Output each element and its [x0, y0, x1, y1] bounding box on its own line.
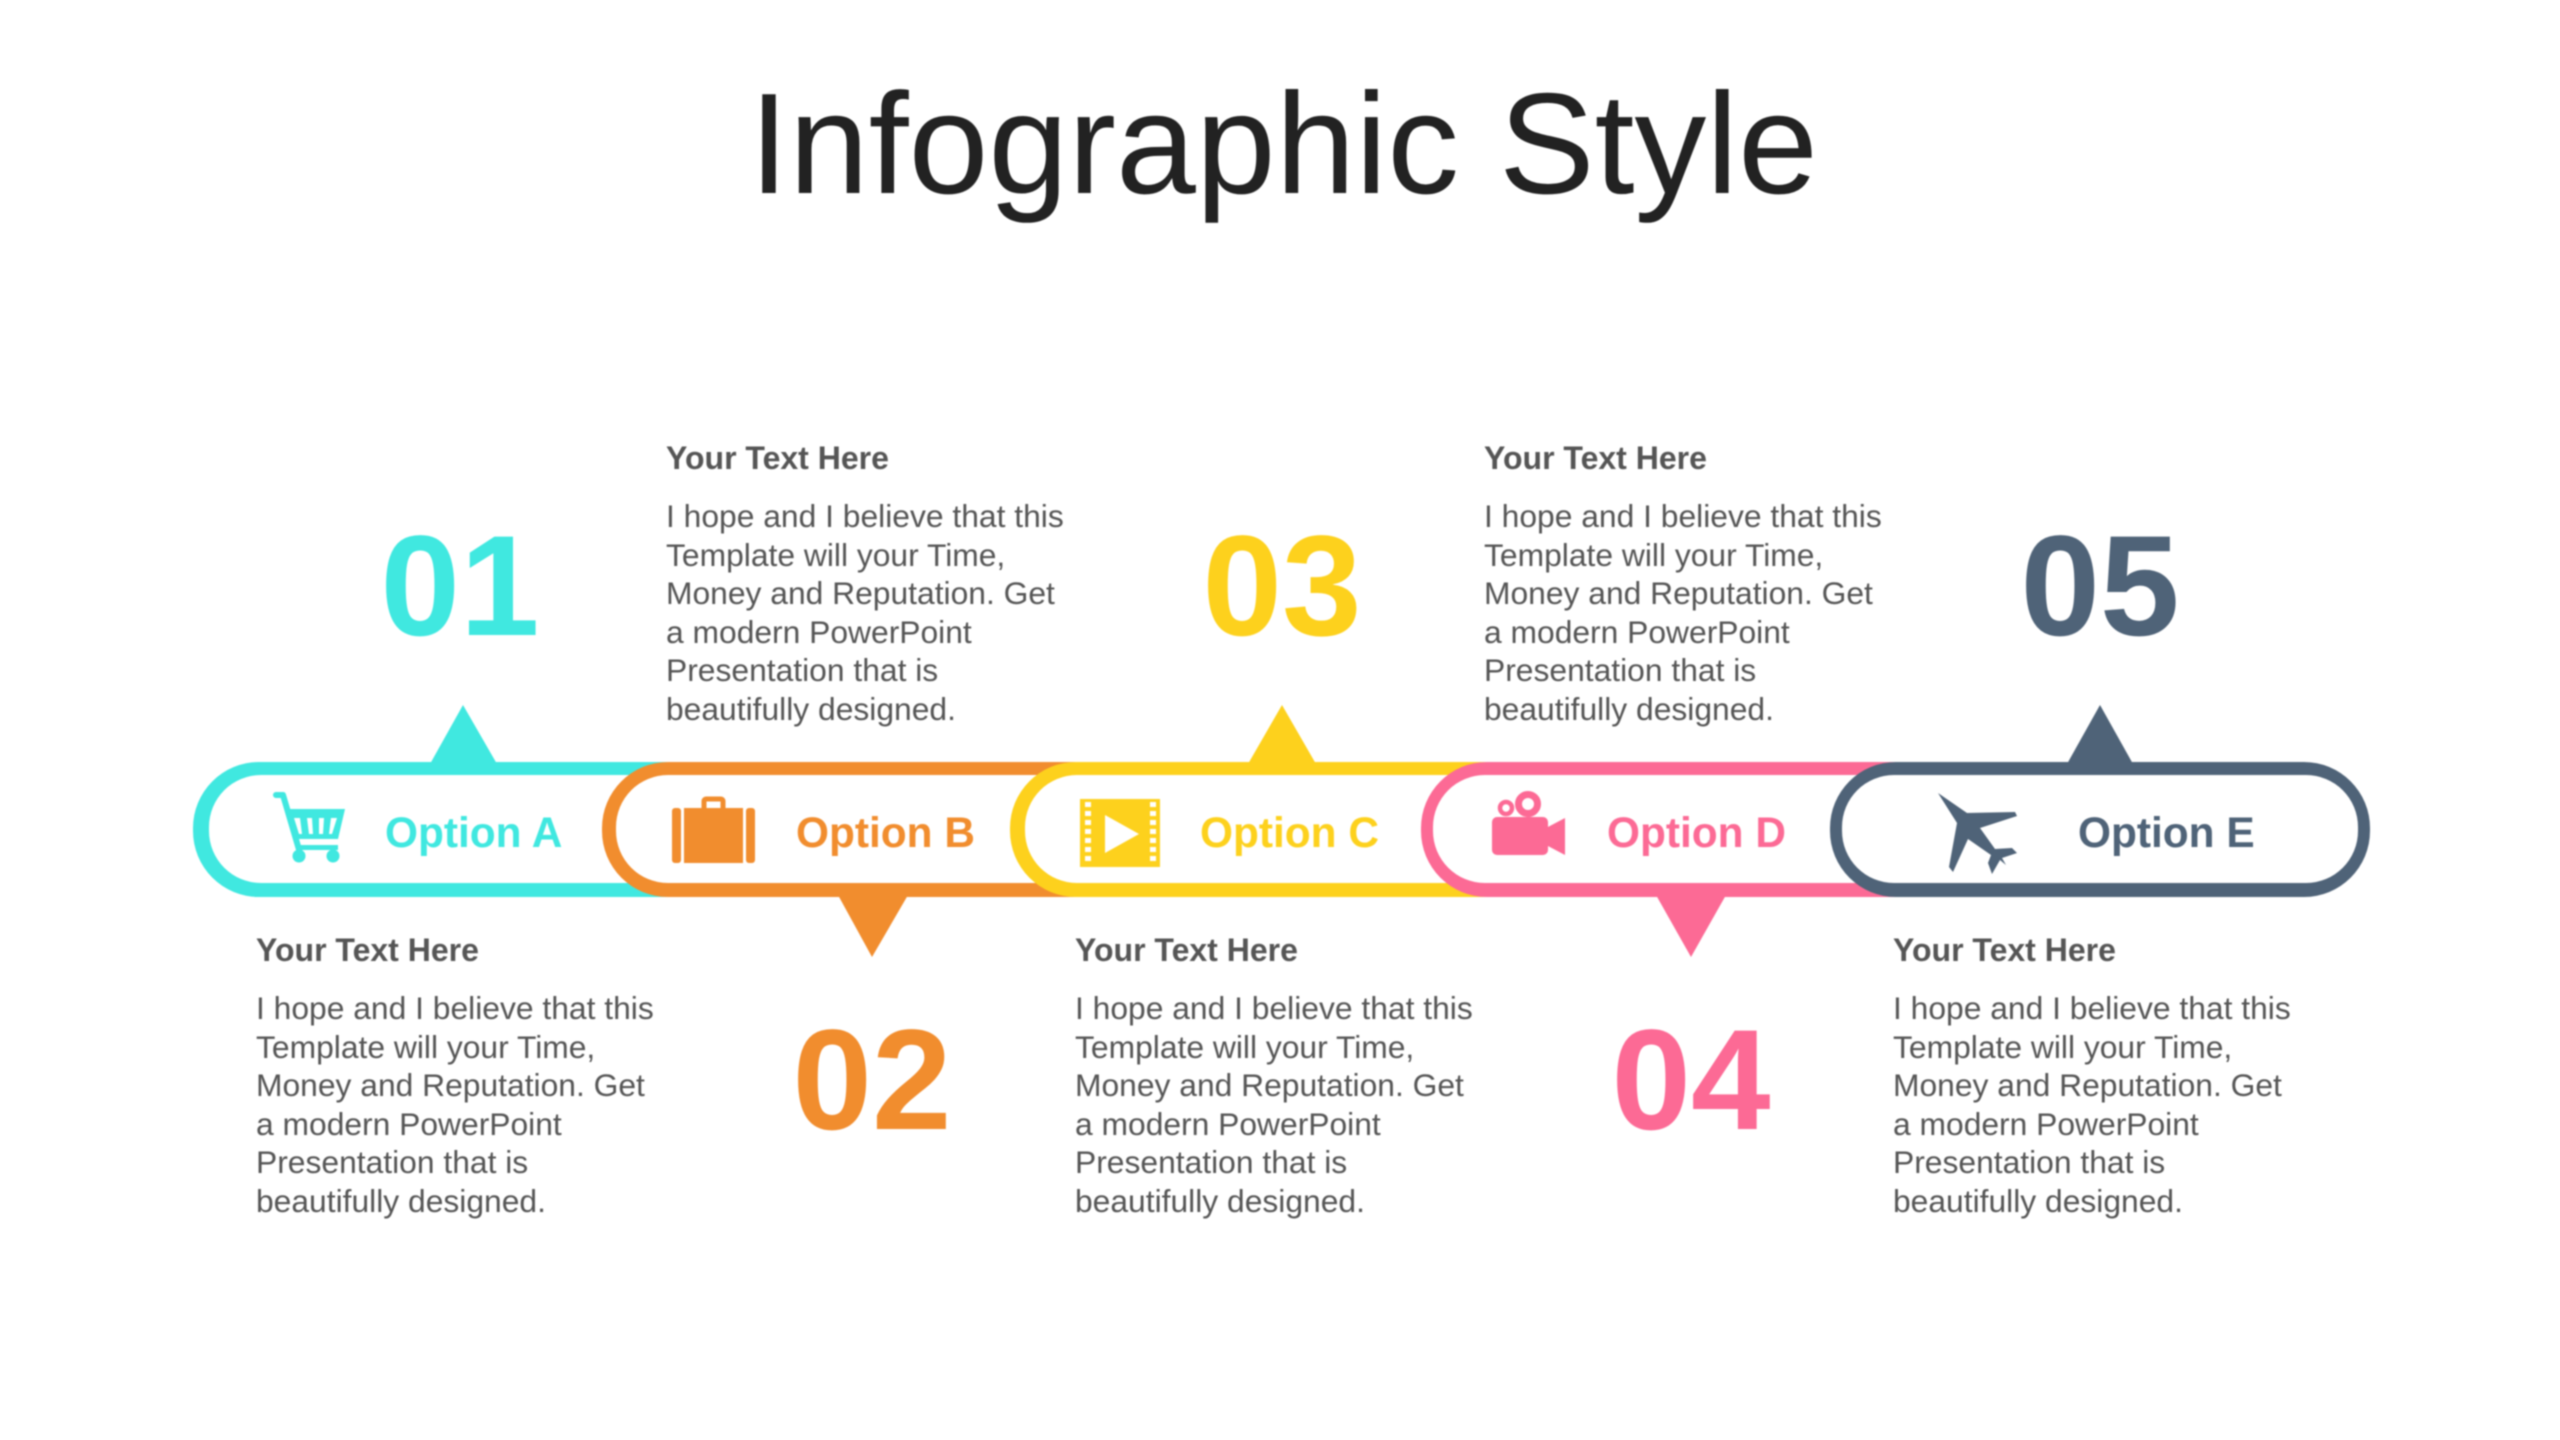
text block 1: Template will your Time,: [256, 1029, 595, 1065]
pointer C: [1248, 705, 1316, 764]
icon: suitcase: [672, 799, 755, 863]
text block 4: a modern PowerPoint: [1484, 614, 1790, 650]
text block 2: Template will your Time,: [666, 537, 1005, 573]
text block 5: Template will your Time,: [1893, 1029, 2232, 1065]
text block 4: Your Text Here: [1484, 440, 1707, 476]
text block 2: Presentation that is: [666, 652, 938, 688]
pointer B: [838, 895, 908, 957]
label E: Option E: [2078, 809, 2255, 856]
icon: airplane: [1938, 793, 2017, 874]
text block 2: I hope and I believe that this: [666, 498, 1064, 534]
text block 3: Presentation that is: [1075, 1144, 1347, 1180]
number 01: 01: [380, 507, 540, 666]
text block 2: [666, 440, 1064, 727]
pointer E: [2067, 705, 2133, 764]
panel: option A: [193, 705, 733, 897]
text block 4: Presentation that is: [1484, 652, 1756, 688]
panel: option B: [602, 762, 1142, 957]
text block 3: a modern PowerPoint: [1075, 1106, 1381, 1142]
text block 5: Money and Reputation. Get: [1893, 1067, 2282, 1103]
text block 5: I hope and I believe that this: [1893, 990, 2291, 1026]
text block 1: beautifully designed.: [256, 1183, 546, 1219]
number 04: 04: [1611, 1001, 1771, 1160]
pill D: [1421, 762, 1961, 897]
text block 5: Your Text Here: [1893, 932, 2116, 968]
text block 4: I hope and I believe that this: [1484, 498, 1882, 534]
text block 5: a modern PowerPoint: [1893, 1106, 2199, 1142]
text block 1: [256, 932, 654, 1219]
text block 1: I hope and I believe that this: [256, 990, 654, 1026]
pill E: [1830, 762, 2370, 897]
text block 3: beautifully designed.: [1075, 1183, 1365, 1219]
pill B: [602, 762, 1142, 897]
label D: Option D: [1607, 809, 1786, 856]
label A: Option A: [385, 809, 562, 856]
text block 5: Presentation that is: [1893, 1144, 2165, 1180]
text block 4: beautifully designed.: [1484, 691, 1774, 727]
text block 3: I hope and I believe that this: [1075, 990, 1473, 1026]
text block 2: Your Text Here: [666, 440, 889, 476]
label C: Option C: [1200, 809, 1379, 856]
text block 1: a modern PowerPoint: [256, 1106, 562, 1142]
number 02: 02: [792, 1001, 952, 1160]
text block 4: Money and Reputation. Get: [1484, 575, 1873, 611]
text block 2: a modern PowerPoint: [666, 614, 972, 650]
text block 5: [1893, 932, 2291, 1219]
text block 3: Money and Reputation. Get: [1075, 1067, 1464, 1103]
panel: option C: [1010, 705, 1550, 897]
number 05: 05: [2020, 507, 2180, 666]
icon: film play: [1080, 799, 1160, 867]
text block 5: beautifully designed.: [1893, 1183, 2183, 1219]
icon: shopping cart: [276, 795, 345, 862]
text block 4: [1484, 440, 1882, 727]
panel: option D: [1421, 762, 1961, 957]
pointer D: [1656, 895, 1726, 957]
text block 1: Money and Reputation. Get: [256, 1067, 645, 1103]
number 03: 03: [1202, 507, 1362, 666]
panel: option E: [1830, 705, 2370, 897]
text block 3: Your Text Here: [1075, 932, 1298, 968]
text block 1: Your Text Here: [256, 932, 479, 968]
text block 1: Presentation that is: [256, 1144, 528, 1180]
pill C: [1010, 762, 1550, 897]
text block 3: Template will your Time,: [1075, 1029, 1414, 1065]
pointer A: [430, 705, 497, 764]
pill A: [193, 762, 733, 897]
label B: Option B: [796, 809, 975, 856]
icon: video camera: [1492, 794, 1565, 855]
text block 3: [1075, 932, 1473, 1219]
text block 2: beautifully designed.: [666, 691, 956, 727]
text block 2: Money and Reputation. Get: [666, 575, 1055, 611]
text block 4: Template will your Time,: [1484, 537, 1823, 573]
title: Infographic Style: [749, 64, 1818, 224]
